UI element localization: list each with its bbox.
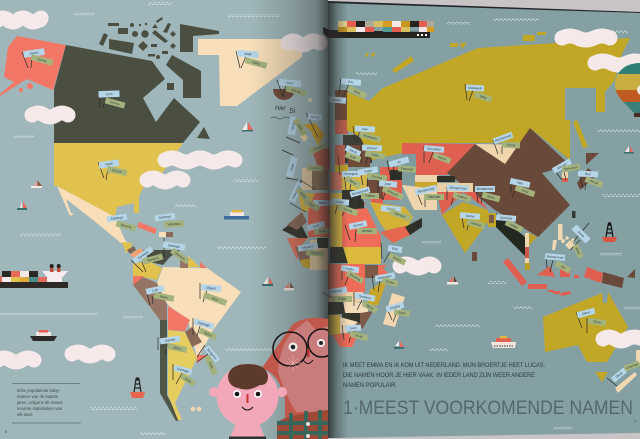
footnote bracket and text: 5/De populairste baby-	[17, 388, 61, 393]
flags: name markers Asia and Oceania: Odval	[507, 143, 516, 147]
Africa north band	[298, 193, 315, 212]
flags: name markers Americas: Sofia	[252, 60, 260, 66]
page number left: 6	[5, 429, 8, 434]
flags: name markers Africa: Sofia	[398, 311, 406, 315]
flags: name markers Asia and Oceania: Xinyi	[521, 188, 529, 194]
right page background	[328, 2, 640, 438]
Greenland	[198, 39, 303, 106]
flags: name markers Asia and Oceania: Aleksandr	[468, 86, 483, 91]
map: Russia	[347, 38, 630, 160]
flags: name markers Europe and Africa west of the fold	[282, 113, 331, 257]
footnote bracket and text	[13, 384, 80, 423]
flags: name markers Europe and Africa west of the fold: Francesco	[291, 184, 301, 200]
flags: name markers Americas: Benjamin	[206, 348, 218, 361]
flags: name markers Asia and Oceania: Mohammed	[477, 187, 494, 191]
flags: name markers Asia and Oceania: Siti	[560, 264, 566, 270]
flags: name markers Americas: Santiago	[137, 250, 150, 260]
flags: name markers Europe and Middle East east of the fold: Maryam	[387, 189, 399, 197]
ship: container ship top right	[323, 21, 434, 38]
gutter shadow left page	[250, 0, 328, 439]
Madagascar	[383, 293, 405, 327]
flags: name markers Americas: Miguel	[206, 286, 216, 291]
flags: name markers Europe and Middle East east of the fold: Eric	[348, 80, 354, 84]
flags: name markers Asia and Oceania: Fatemah	[428, 195, 441, 199]
map: Europe, Africa and Middle East	[282, 90, 422, 347]
Horn	[383, 253, 408, 278]
flags: name markers Americas: Emma	[37, 57, 47, 63]
flags: name markers Asia and Oceania: Jacob	[577, 230, 586, 239]
ship: container ship left	[0, 264, 68, 288]
flags: name markers Asia and Oceania: Oliver	[581, 310, 591, 316]
flags: name markers Americas: Santiago	[176, 367, 190, 374]
icon: buoy left	[130, 377, 145, 398]
flags: name markers Americas: Emma	[291, 88, 301, 94]
flags: name markers Europe and Middle East east of the fold: Artyom	[367, 146, 377, 150]
intro text: IK MEET EMMA EN IK KOM UIT NEDERLAND. MIJN BROERTJE HEET LUCAS.	[343, 362, 545, 369]
flags: name markers Asia and Oceania: Himari	[589, 179, 599, 186]
intro text: DIE NAMEN HOOR JE HIER VAAK. IN IEDER LAND ZIJN WEER ANDERE	[343, 372, 535, 379]
flags: name markers Africa: Emily	[355, 333, 364, 339]
flags: name markers Americas: Noah	[105, 162, 113, 167]
flags: name markers Americas: Sofia	[208, 361, 214, 369]
flags: name markers Europe and Africa west of the fold: Lucia	[311, 166, 319, 170]
flags: name markers Europe and Middle East east of the fold: Fatima	[365, 194, 375, 198]
flags: name markers Asia and Oceania: Muhammad	[449, 186, 467, 191]
flags: name markers Europe and Africa west of the fold: Sofia	[299, 191, 307, 199]
flags: name markers Europe and Middle East east of the fold: Julia	[349, 154, 357, 160]
Red Sea channel	[362, 195, 386, 235]
flags: name markers Americas: Sofia	[184, 376, 192, 384]
flags: name markers Europe and Middle East east of the fold: Zeynep	[371, 174, 383, 180]
Arabia	[370, 202, 413, 243]
flags: name markers Africa: Blessing	[349, 272, 361, 282]
flags: name markers Asia and Oceania: Somchai	[500, 216, 513, 221]
footnote bracket and text: recente statistieken van	[17, 406, 63, 411]
flags: name markers Asia and Oceania: Oliver	[615, 370, 624, 379]
flags: name markers Americas: Aron	[286, 81, 294, 85]
flags: name markers Europe and Africa west of the fold: Ama	[319, 229, 326, 233]
flags: name markers Europe and Middle East east of the fold: Yusuf	[364, 168, 372, 174]
flags: name markers Asia and Oceania: Muhammad	[494, 133, 512, 143]
flags: name markers Europe and Africa west of the fold: Hugo	[289, 163, 295, 171]
flags: name markers Europe and Middle East east of the fold: Mohammed	[351, 188, 369, 196]
flags: name markers Africa: Grace	[385, 279, 395, 285]
Alaska	[0, 36, 66, 96]
flags: name markers Asia and Oceania: Fatima	[457, 194, 467, 200]
flags: name markers Europe and Africa west of the fold: Ines	[308, 202, 316, 209]
footnote bracket and text: namen van de laatste	[17, 394, 59, 399]
icons: sailboats	[17, 122, 634, 349]
flags: name markers Africa: Mamadou	[378, 274, 393, 280]
flags: name markers Americas: Santiago	[158, 214, 172, 220]
flags: name markers Europe and Africa west of the fold: Aicha	[311, 251, 319, 255]
flags: name markers Asia and Oceania: Mariam	[394, 211, 406, 219]
flags: name markers Americas: Ximena	[120, 223, 132, 229]
handwriting scribble: Hier	[275, 106, 287, 112]
flags: name markers Africa: Santana	[359, 294, 371, 300]
character: girl with glasses	[262, 318, 328, 439]
flags: name markers Africa: Ahmed	[362, 229, 372, 233]
flags: name markers Europe and Middle East east of the fold: Fatemeh	[401, 167, 414, 172]
clouds	[0, 18, 640, 362]
flags: name markers Asia and Oceania: Nursultan	[427, 147, 441, 152]
icon: buoy right	[602, 222, 617, 242]
flags: name markers Europe and Middle East east of the fold: Ali	[397, 160, 402, 164]
flags: name markers Africa: Amina	[392, 255, 402, 263]
character: boy	[209, 364, 287, 439]
icon: hot air balloon	[615, 63, 640, 117]
flags: name markers Americas: Luis	[152, 287, 159, 293]
intro text	[343, 362, 545, 389]
flags: name markers Asia and Oceania: Mohammad	[417, 186, 435, 194]
map: North America	[0, 17, 312, 258]
flags: name markers Europe and Middle East east of the fold	[328, 78, 416, 216]
footnote bracket and text: jaren, volgens de meest	[16, 400, 63, 405]
flags: name markers Americas: Mariana	[174, 251, 186, 261]
ship: small ferry left	[30, 330, 57, 341]
flags: name markers Europe and Middle East east of the fold: Elsa	[353, 89, 361, 95]
flags: name markers Africa: Liam	[349, 326, 357, 330]
flags: name markers Asia and Oceania: Aisha	[487, 194, 496, 200]
intro text: NAMEN POPULAIR.	[343, 382, 397, 389]
flags: name markers Africa: Ainsley	[390, 304, 401, 310]
flags: name markers Asia and Oceania: Mary	[575, 247, 581, 255]
Mexico	[57, 186, 128, 243]
flags: name markers Europe and Africa west of the fold: Kofi	[313, 223, 319, 229]
Southern Africa	[328, 292, 363, 302]
flags: name markers Asia and Oceania: Ananya	[470, 221, 482, 227]
map: South America	[133, 250, 241, 421]
footnote bracket and text: elk land.	[17, 412, 33, 417]
Cuba and islands	[137, 222, 157, 234]
flags: name markers Americas: Malik	[244, 52, 252, 56]
handwriting scribble: Si	[289, 108, 296, 115]
flags: name markers Americas: Santiago	[167, 243, 181, 249]
map: Australia and New Zealand	[543, 292, 640, 393]
flags: name markers Americas: Maria	[203, 331, 213, 338]
flags: name markers Asia and Oceania: Seo-yeon	[564, 165, 578, 171]
flags: name markers Asia and Oceania	[381, 84, 640, 386]
flags: name markers Europe and Africa west of the fold: Moussa	[302, 244, 314, 250]
left page background	[0, 0, 328, 439]
flags: name markers Americas: Valentina	[167, 222, 181, 226]
ship: ferry near Mexico	[224, 210, 249, 220]
handwriting scribble	[271, 106, 296, 119]
flags: name markers Asia and Oceania: Omar	[387, 207, 396, 212]
flags: name markers Africa: Eliot	[392, 247, 398, 252]
flags: name markers Africa	[322, 220, 410, 343]
flags: name markers Europe and Africa west of the fold: Alba	[297, 123, 303, 131]
flags: name markers Europe and Middle East east of the fold: Amir	[385, 182, 392, 186]
flags: name markers Africa: Chipo	[338, 297, 346, 301]
ship: ferry bottom right	[491, 336, 516, 348]
flags: name markers Americas: Agustin	[164, 337, 176, 343]
flags: name markers Americas: Santiago	[110, 215, 124, 221]
Arctic islands	[99, 17, 219, 139]
West Africa	[282, 218, 308, 238]
flags: name markers Africa: Ahmed	[353, 222, 364, 228]
USA	[54, 143, 183, 217]
flags: name markers Europe and Africa west of the fold: Noah	[290, 122, 296, 130]
flags: name markers Europe and Middle East east of the fold: Georgios	[345, 172, 358, 176]
flags: name markers Asia and Oceania: Malee	[509, 222, 519, 230]
flags: name markers Africa: Maria	[365, 303, 375, 311]
flags: name markers Europe and Africa west of the fold: Yanis	[318, 201, 326, 205]
flags: name markers Asia and Oceania: Wei	[517, 181, 523, 186]
flags: name markers Americas: Sofia	[173, 345, 181, 351]
flags: name markers Americas: Mariana	[147, 256, 159, 263]
flags: name markers Europe and Africa west of the fold: Lucas	[311, 115, 320, 119]
flags: name markers Europe and Middle East east of the fold: Adam	[336, 200, 345, 204]
Canada	[54, 45, 200, 143]
flags: name markers Europe and Middle East east of the fold: Ivan	[362, 127, 368, 131]
flags: name markers Americas: Santiago	[197, 321, 211, 328]
flags: name markers Europe and Middle East east of the fold: Salma	[343, 207, 353, 214]
flags: name markers Americas	[22, 48, 306, 387]
flags: name markers Asia and Oceania: Aarav	[466, 214, 475, 218]
map: Asia	[365, 32, 599, 270]
flags: name markers Europe and Middle East east of the fold: Jakub	[348, 147, 358, 155]
flags: name markers Europe and Middle East east of the fold: Anastasia	[363, 133, 377, 141]
flags: name markers Africa: Kwame	[331, 288, 343, 294]
flags: name markers Asia and Oceania: Charlotte	[625, 362, 639, 370]
flags: name markers Asia and Oceania: Olivia	[593, 320, 601, 325]
map: Indonesia and Philippines	[503, 224, 635, 296]
flags: name markers Asia and Oceania: Sofia	[479, 94, 487, 100]
Iceland	[273, 89, 295, 100]
flags: name markers Americas: Maria	[160, 294, 168, 300]
flags: name markers Europe and Middle East east of the fold: Sofia	[371, 152, 379, 158]
flags: name markers Asia and Oceania: Muhammad	[546, 254, 564, 260]
flags: name markers Americas: Emma	[112, 168, 122, 174]
flags: name markers Americas: Liam	[105, 92, 113, 96]
flags: name markers Asia and Oceania: Aisha	[438, 155, 447, 161]
flags: name markers Africa: Arthur	[345, 267, 355, 272]
Europe west	[303, 123, 325, 145]
flags: name markers Europe and Africa west of the fold: Emma	[313, 144, 323, 152]
flags: name markers Asia and Oceania: Min-jun	[557, 162, 568, 170]
flags: name markers Americas: Emma	[110, 100, 120, 106]
flags: name markers Americas: James	[29, 50, 39, 56]
flags: name markers Europe and Middle East east of the fold: Maria	[348, 178, 358, 186]
flags: name markers Americas: Alice	[211, 296, 219, 302]
page number right: 7	[634, 419, 637, 424]
flags: name markers Europe and Middle East east of the fold: Oskar	[333, 98, 342, 103]
gutter shadow right page	[328, 2, 348, 438]
flags: name markers Asia and Oceania: Ren	[585, 172, 591, 176]
